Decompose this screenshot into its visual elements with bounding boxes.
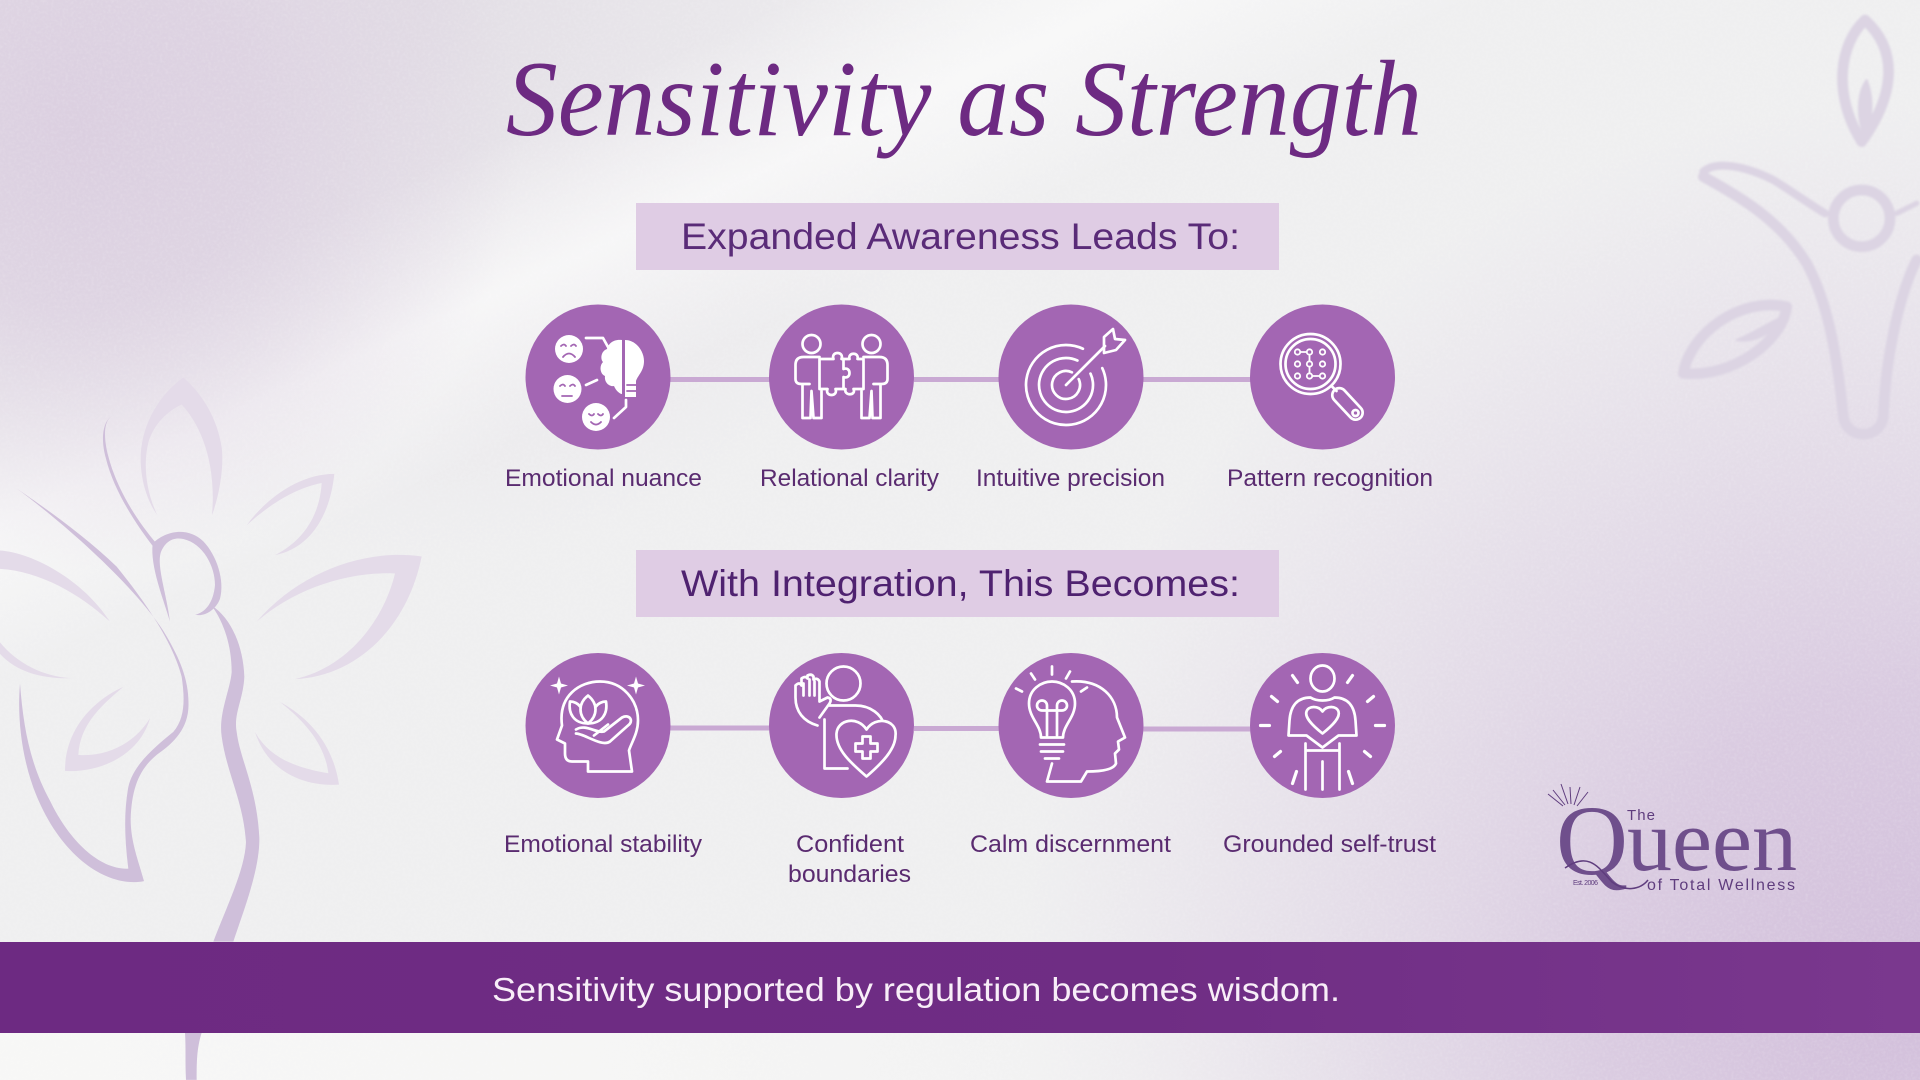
label: Relational clarity [760, 465, 939, 492]
item: relational clarity [760, 304, 939, 492]
label: Emotional stability [504, 831, 702, 858]
label line 2: boundaries [788, 861, 911, 888]
icon: target and arrow [1026, 329, 1125, 425]
icon: people with puzzle [796, 335, 888, 418]
heading: with integration [636, 550, 1279, 617]
label: Calm discernment [970, 831, 1171, 858]
petals [0, 377, 422, 785]
item: grounded self-trust [1223, 653, 1436, 858]
item: confident boundaries [769, 653, 914, 888]
item: intuitive precision [976, 304, 1165, 492]
body [17, 416, 259, 1080]
label: Pattern recognition [1227, 465, 1433, 492]
logo letters: ueen [1627, 793, 1797, 890]
heading: expanded awareness [636, 203, 1279, 270]
heading: with integration: With Integration, This Becomes: [681, 563, 1240, 604]
label: Confident [796, 831, 904, 858]
label: Intuitive precision [976, 465, 1165, 492]
logo the: The [1627, 807, 1655, 824]
decorative figure left [0, 377, 422, 1080]
logo crown [1548, 784, 1588, 806]
footer bar [0, 942, 1920, 1033]
icon: magnifier [1280, 334, 1366, 423]
connector row 2 [670, 726, 1251, 732]
item: calm discernment [970, 653, 1171, 858]
logo tail [1565, 861, 1648, 889]
decorative figure right [1683, 20, 1917, 434]
label: Emotional nuance [505, 465, 702, 492]
logo wordmark: Q [1556, 785, 1628, 896]
logo tagline: of Total Wellness [1647, 877, 1795, 894]
icon: faces and brain [554, 335, 644, 431]
icon: person, hand and heart [796, 666, 896, 776]
icon: light bulb and head [1016, 666, 1125, 782]
heading: expanded awareness: Expanded Awareness Leads To: [681, 216, 1240, 257]
item: emotional stability [504, 653, 702, 858]
title: Sensitivity as Strength [506, 40, 1422, 159]
item: pattern recognition [1227, 304, 1433, 492]
logo est: Est. 2006 [1573, 880, 1598, 887]
footer bar: Sensitivity supported by regulation becomes wisdom. [492, 971, 1340, 1008]
icon: head with lotus [550, 676, 645, 772]
logo [1548, 784, 1797, 896]
label: Grounded self-trust [1223, 831, 1436, 858]
connector row 1 [670, 377, 1251, 382]
item: emotional nuance [505, 304, 702, 492]
icon: person with heart [1260, 666, 1384, 790]
